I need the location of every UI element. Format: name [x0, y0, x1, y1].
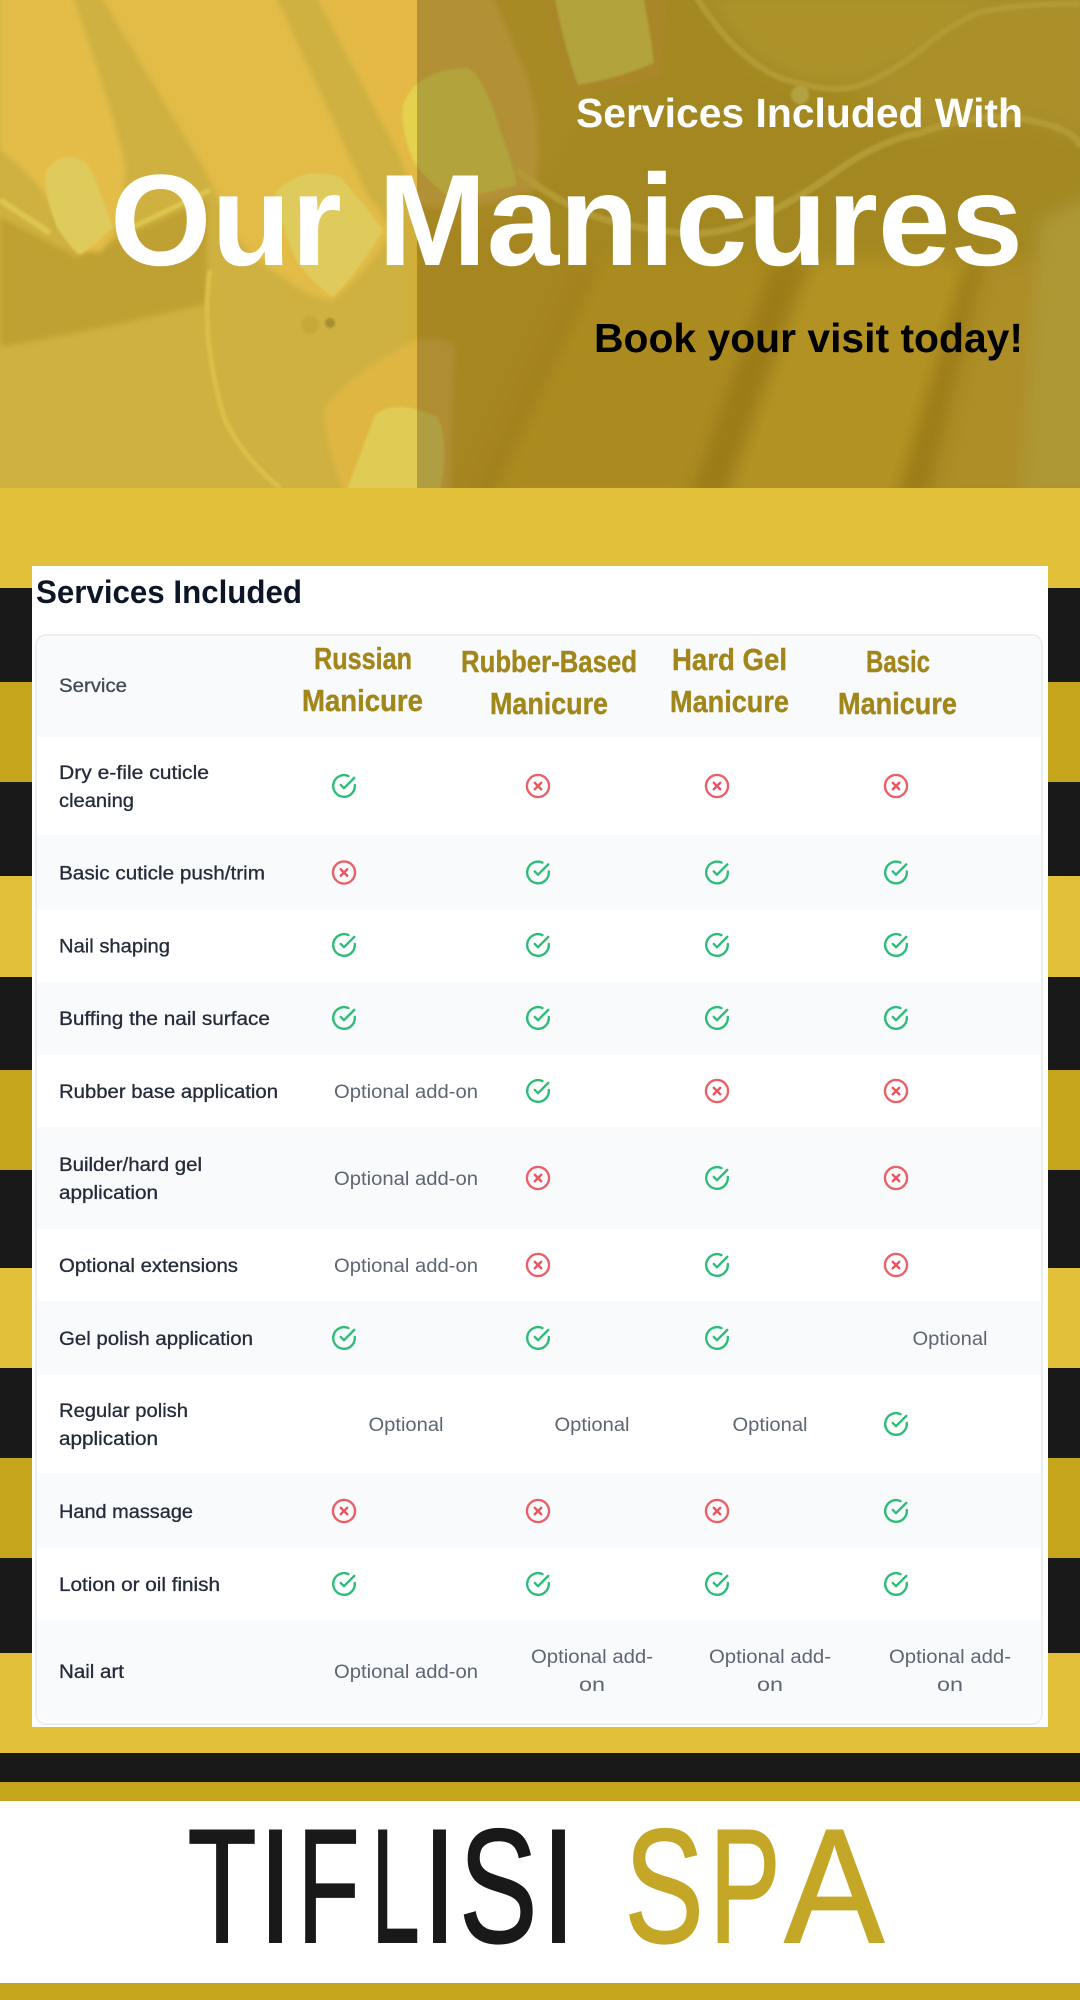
- hero eyebrow: Services Included With: Services Included With: [576, 90, 1023, 136]
- logo: TIFLISI SPA: F: [298, 1796, 360, 1977]
- row: Nail art: Optional add-: [709, 1647, 831, 1668]
- row: Dry e-file cuticle cleaning: cleaning: [59, 791, 134, 812]
- row: Builder/hard gel application: Optional add-on: [334, 1169, 478, 1190]
- header: Rubber-Based Manicure: Rubber-Based: [461, 644, 637, 679]
- table frame: [36, 635, 1042, 1724]
- row: Buffing the nail surface: Buffing the nail surface: [59, 1009, 270, 1030]
- header: Russian Manicure: [302, 641, 423, 718]
- row: Builder/hard gel application: application: [59, 1183, 158, 1204]
- panel: services table card: [32, 566, 1048, 1727]
- row: Optional extensions: Optional add-on: [334, 1256, 478, 1277]
- logo: TIFLISI SPA: L: [372, 1796, 420, 1977]
- row: Buffing the nail surface: [37, 982, 1041, 1055]
- header: Rubber-Based Manicure: [461, 644, 637, 721]
- row: Nail art: on: [757, 1675, 783, 1696]
- row: Regular polish application: application: [59, 1429, 158, 1450]
- row: Gel polish application: [37, 1301, 1041, 1375]
- darker right panel: [417, 0, 1080, 488]
- row: Regular polish application: Optional: [554, 1415, 630, 1436]
- row: Dry e-file cuticle cleaning: [37, 737, 1041, 835]
- row: Regular polish application: Regular polish: [59, 1401, 188, 1422]
- heading: Services Included: Services Included: [36, 574, 302, 610]
- row: Basic cuticle push/trim: [37, 835, 1041, 910]
- row: Lotion or oil finish: [37, 1548, 1041, 1620]
- row: Optional extensions: Optional extensions: [59, 1256, 238, 1277]
- logo: TIFLISI SPA: I: [422, 1796, 456, 1977]
- header: Russian Manicure: Manicure: [302, 683, 423, 718]
- row: Optional extensions: [37, 1229, 1041, 1301]
- header: Basic Manicure: [838, 644, 957, 721]
- row: Hand massage: Hand massage: [59, 1502, 193, 1523]
- header: Basic Manicure: Manicure: [838, 686, 957, 721]
- row: Builder/hard gel application: [37, 1127, 1041, 1229]
- header: Russian Manicure: Russian: [314, 641, 412, 676]
- row: Nail shaping: [37, 910, 1041, 982]
- footer logo band: [0, 1796, 1080, 2000]
- header: Hard Gel Manicure: Manicure: [670, 684, 789, 719]
- logo: TIFLISI SPA: I: [542, 1796, 576, 1977]
- row: Builder/hard gel application: Builder/hard gel: [59, 1155, 202, 1176]
- logo: TIFLISI SPA: [188, 1796, 884, 1977]
- row: Rubber base application: Rubber base application: [59, 1082, 278, 1103]
- logo: TIFLISI SPA: A: [784, 1796, 884, 1977]
- striped background: [0, 488, 1080, 1801]
- row: Basic cuticle push/trim: Basic cuticle push/trim: [59, 864, 265, 884]
- row: Rubber base application: Optional add-on: [334, 1082, 478, 1103]
- row: Dry e-file cuticle cleaning: Dry e-file cuticle: [59, 763, 209, 784]
- row: Nail art: [37, 1620, 1041, 1721]
- logo: TIFLISI SPA: T: [188, 1796, 257, 1977]
- header: Hard Gel Manicure: [670, 642, 789, 719]
- row: Nail art: on: [937, 1675, 963, 1696]
- row: Regular polish application: Optional: [368, 1415, 444, 1436]
- row: Regular polish application: Optional: [732, 1415, 808, 1436]
- header: Rubber-Based Manicure: Manicure: [490, 686, 608, 721]
- hero photo of manicured hands with gold overlay: [0, 0, 1080, 500]
- row: Nail art: on: [579, 1675, 605, 1696]
- row: Nail art: Optional add-: [889, 1647, 1011, 1668]
- row: Gel polish application: Gel polish application: [59, 1329, 253, 1350]
- row: Nail shaping: Nail shaping: [59, 936, 170, 958]
- header: Hard Gel Manicure: Hard Gel: [672, 642, 787, 677]
- row: Hand massage: [37, 1473, 1041, 1548]
- row: Nail art: Optional add-: [531, 1647, 653, 1668]
- row: Gel polish application: Optional: [912, 1329, 988, 1350]
- table header row: [37, 636, 1041, 737]
- hero subtitle: Book your visit today: Book your visit today!: [594, 315, 1023, 361]
- row: Nail art: Nail art: [59, 1662, 125, 1683]
- row: Lotion or oil finish: Lotion or oil finish: [59, 1575, 220, 1596]
- header: Service: Service: [59, 676, 127, 697]
- logo: TIFLISI SPA: S: [459, 1796, 537, 1977]
- darker background fold on the left: [0, 200, 207, 347]
- logo: TIFLISI SPA: S: [625, 1796, 704, 1977]
- row: Nail art: Optional add-on: [334, 1662, 478, 1683]
- row: Regular polish application: [37, 1375, 1041, 1473]
- row: Rubber base application: [37, 1055, 1041, 1127]
- header: Basic Manicure: Basic: [866, 644, 930, 679]
- logo: TIFLISI SPA: I: [258, 1796, 292, 1977]
- hero title: Our Manicures: Our Manicures: [110, 147, 1023, 293]
- logo: TIFLISI SPA: P: [710, 1796, 780, 1977]
